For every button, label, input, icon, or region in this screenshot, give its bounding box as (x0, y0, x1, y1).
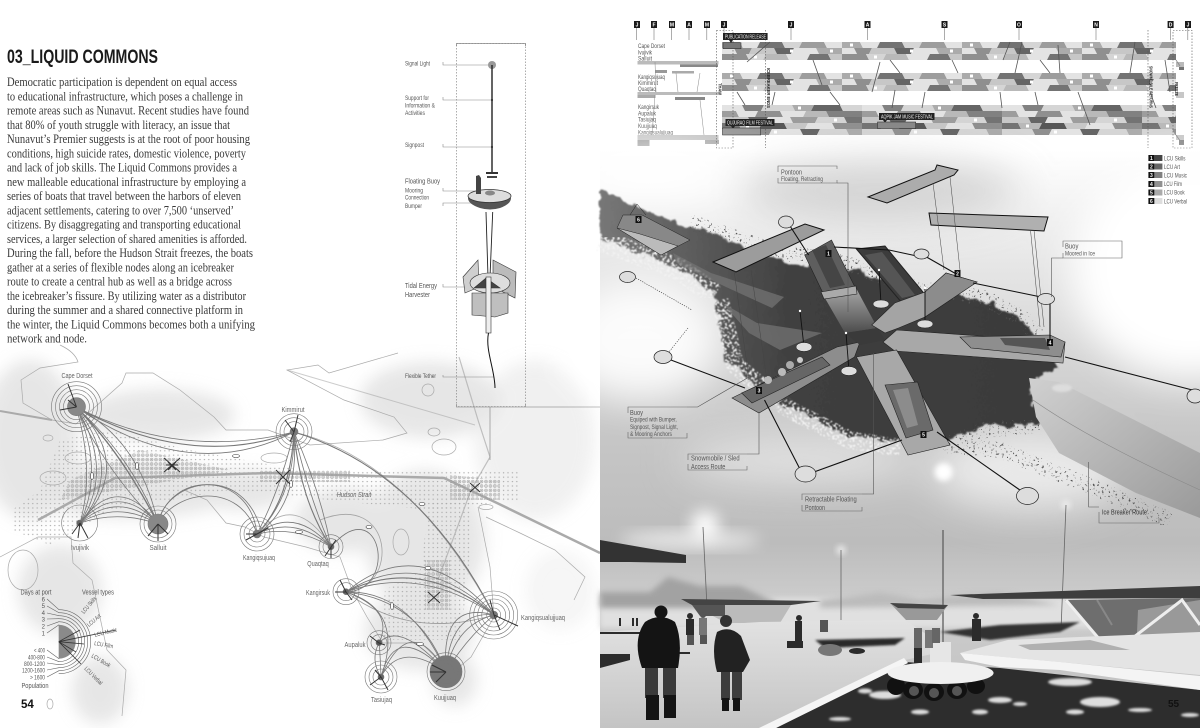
vessel type legend: 2 (1150, 164, 1153, 170)
map legend: days at port, vessel types, population: Vessel types (82, 590, 114, 596)
panel: aerial plan on ice (560, 150, 1200, 728)
body text: gather at a series of flexible nodes along an icebreaker (7, 260, 235, 274)
body text (7, 75, 255, 346)
vessel type legend: 6 (1150, 199, 1153, 205)
settlement row labels: Aupaluk (638, 112, 657, 118)
pavilion centre (890, 603, 948, 620)
vessel type legend: LCU Art (1164, 165, 1180, 171)
buoy labels: Signpost (405, 143, 424, 149)
stub bands (638, 61, 719, 146)
people in foreground (638, 606, 750, 720)
mooring rings (620, 216, 1200, 504)
map legend: days at port, vessel types, population: 1200-1600 (22, 668, 46, 674)
vessel type legend: LCU Film (1164, 182, 1182, 188)
boat 6 (617, 204, 690, 255)
settlement row labels: Cape Dorset (638, 44, 665, 50)
map legend: days at port, vessel types, population (20, 590, 118, 690)
body text: During the fall, before the Hudson Strait freezes, the boats (7, 246, 253, 260)
callout: buoy equipment: & Mooring Anchors (630, 432, 672, 438)
callout: buoy moored in ice: Moored in Ice (1065, 252, 1096, 258)
callout: buoy equipment: Buoy (630, 410, 643, 417)
settlement labels: Kimmirut (282, 407, 305, 414)
month tabs: J (636, 22, 639, 28)
boat number tags: 5 (922, 432, 925, 438)
callout: pontoon: Floating, Retracting (781, 177, 823, 183)
vessel type legend: 1 (1150, 156, 1153, 162)
callout: snowmobile access: Access Route (691, 464, 725, 471)
callout: buoy equipment: Signpost, Signal Light, (630, 425, 678, 431)
settlement labels: Kuujjuaq (434, 695, 456, 702)
panel: Hudson Strait route map (0, 345, 600, 724)
event callouts: QUJURAQ FILM FESTIVAL (727, 120, 773, 126)
vessels and crossing nodes (90, 454, 480, 646)
vessel type legend: LCU Skills (1164, 156, 1185, 162)
callout: retractable pontoon: Retractable Floating (805, 496, 857, 504)
settlement row labels: Kangiqsujuaq (638, 75, 665, 81)
map legend: days at port, vessel types, population: 4 (42, 611, 46, 617)
callout: buoy moored in ice (1063, 241, 1122, 258)
body text: citizens. By disaggregating and transporting educational (7, 218, 241, 232)
settlement labels: Quaqtaq (307, 561, 329, 568)
callout leaders (687, 183, 1099, 507)
vessel type legend: 4 (1150, 182, 1153, 188)
signal post (486, 61, 498, 178)
sun glows (620, 463, 1071, 555)
boat number tags: 3 (758, 388, 761, 394)
month tabs: J (790, 22, 793, 28)
buoy disc (468, 175, 511, 277)
ice chunks (829, 678, 1199, 721)
left roof (600, 540, 686, 563)
settlement labels: Kangirsuk (306, 590, 330, 597)
page number 54: 54 (21, 699, 34, 711)
body text: series of boats that travel between the harbors of eleven (7, 189, 241, 203)
dot grid (12, 430, 520, 640)
land shading (0, 360, 595, 724)
central platform: pontoons and boats (732, 240, 1065, 455)
map legend: days at port, vessel types, population: LCU Film (94, 641, 113, 650)
settlement row labels: Kimmirut (638, 81, 658, 87)
settlement labels: Kangiqsujuaq (243, 555, 275, 562)
far ice and dark water strip (940, 622, 1080, 640)
callout: pontoon: Pontoon (781, 170, 802, 176)
phase labels: SNOWMOBILE RETURNS (1148, 66, 1154, 108)
body text: during the summer and a shared connective platform in (7, 303, 243, 317)
vessel type legend: LCU Book (1164, 190, 1185, 196)
vessel type legend: LCU Music (1164, 174, 1187, 180)
settlement row labels: Kangirsuk (638, 105, 660, 111)
dark openings in the ice (600, 632, 905, 668)
vessel transfers (737, 42, 1181, 142)
buoy labels (405, 62, 440, 380)
month tabs: M (670, 22, 674, 28)
month tabs: N (1094, 22, 1098, 28)
large pavilion right (950, 586, 1200, 655)
callout: ice breaker route (1099, 510, 1159, 523)
buoy labels: Tidal Energy (405, 283, 437, 290)
vessel type legend (1148, 155, 1187, 206)
month tabs: M (705, 22, 709, 28)
phase labels: THAW (718, 83, 722, 96)
platform edge white (759, 632, 1200, 728)
body text: new malleable educational infrastructure by employing a (7, 175, 246, 189)
people in middle distance (619, 612, 981, 663)
month tabs: A (687, 22, 691, 28)
month tabs: J (1187, 22, 1190, 28)
sky and ice background (600, 150, 1200, 728)
phase labels (718, 66, 1179, 108)
map legend: days at port, vessel types, population: 6 (42, 598, 46, 604)
map legend: days at port, vessel types, population: Population (22, 683, 49, 690)
settlement row labels: Ivujivik (638, 50, 653, 56)
buoy labels: Connection (405, 196, 429, 202)
map legend: days at port, vessel types, population: > 1600 (30, 676, 46, 682)
callout: ice breaker route: Ice Breaker Route (1102, 510, 1147, 516)
phase labels: ICEBREAKER ENDS (766, 68, 771, 108)
vessel type legend: LCU Verbal (1164, 200, 1187, 206)
month tabs: S (943, 22, 947, 28)
panel: vessel calendar (634, 21, 1192, 148)
settlement labels: Hudson Strait (337, 492, 372, 499)
map legend: days at port, vessel types, population: 2 (42, 624, 46, 630)
buoy labels: Support for (405, 96, 429, 102)
buoy labels: Floating Buoy (405, 178, 440, 186)
map legend: days at port, vessel types, population: LCU Book (90, 654, 112, 670)
map legend: days at port, vessel types, population: 3 (42, 618, 46, 624)
body text: the winter, the Liquid Commons becomes both a unifying (7, 317, 255, 331)
map legend: days at port, vessel types, population: LCU Music (94, 628, 118, 639)
ice debris (600, 222, 1170, 520)
month tabs: D (1169, 22, 1173, 28)
pavilion left (681, 599, 821, 623)
coastlines and islands (0, 345, 585, 716)
month tabs (634, 21, 1191, 40)
settlement labels: Aupaluk (344, 642, 366, 649)
body text: route to create a central hub as well as a bridge across (7, 275, 232, 289)
light poles (703, 505, 1066, 642)
buoy labels: Information & (405, 104, 435, 110)
body text: adjacent settlements, catering to over 7,500 ‘unserved’ (7, 203, 234, 217)
distant mountains and horizon (600, 577, 1200, 628)
settlement row labels (638, 44, 673, 136)
ice breaker fissure water (600, 190, 1059, 442)
month tabs: J (723, 22, 726, 28)
submerged pontoons (673, 253, 822, 350)
settlement labels: Salluit (150, 545, 167, 552)
event callouts: AQPIK JAM MUSIC FESTIVAL (881, 114, 933, 120)
map legend: days at port, vessel types, population: 5 (42, 604, 46, 610)
settlement labels: Cape Dorset (62, 373, 93, 380)
vessel spokes (60, 384, 518, 690)
dotted ice mooring (636, 278, 692, 352)
mooring lines (663, 226, 1200, 495)
callout: buoy equipment (628, 407, 687, 438)
boat number tags (636, 216, 1053, 438)
boat number tags: 6 (637, 218, 640, 224)
panel: floating buoy section (405, 44, 600, 460)
exploded guide lines (734, 177, 1044, 380)
event callouts (722, 33, 934, 135)
body text: conditions, high suicide rates, domestic violence, poverty (7, 146, 247, 160)
exploded pontoons (713, 165, 1048, 272)
callout: pontoon (778, 166, 837, 183)
vessel type legend: 5 (1150, 190, 1153, 196)
callout: snowmobile access: Snowmobile / Sled (691, 456, 740, 462)
settlement row labels: Kangiqsualujjuaq (638, 130, 673, 136)
vessel type legend: 3 (1150, 173, 1153, 179)
map legend: days at port, vessel types, population: LCU Verbal (83, 666, 103, 687)
title: 03_LIQUID COMMONS (7, 47, 158, 68)
schedule bands (722, 42, 1184, 145)
body text: to educational infrastructure, which poses a challenge in (7, 89, 243, 103)
tidal turbine (463, 260, 516, 388)
callout: snowmobile access (688, 454, 747, 471)
buoy labels: Harvester (405, 292, 431, 299)
body text: Nunavut’s Premier suggests is at the root of poor housing (7, 132, 250, 146)
leader lines (443, 62, 494, 377)
settlement nodes (52, 382, 518, 693)
ice platform foreground (600, 620, 950, 728)
buoy labels: Bumper (405, 204, 422, 210)
settlement row labels: Salluit (638, 56, 652, 62)
callout: buoy equipment: Equiped with Bumper, (630, 418, 677, 424)
body text: network and node. (7, 332, 87, 346)
buoy labels: Mooring (405, 188, 423, 194)
body text: Democratic participation is dependent on equal access (7, 75, 237, 89)
month tabs: A (866, 22, 870, 28)
settlement labels: Kangiqsualujjuaq (521, 615, 565, 622)
map legend: days at port, vessel types, population: LCU Art (86, 613, 103, 629)
floating buoy with tyres (887, 642, 994, 701)
callout: retractable pontoon (802, 494, 862, 512)
body text: the icebreaker’s fissure. By utilizing water as a distributor (7, 289, 247, 303)
callout: retractable pontoon: Pontoon (805, 505, 825, 512)
icebreaker route (0, 357, 600, 580)
settlement row labels: Kuujjuaq (638, 124, 657, 130)
map legend: days at port, vessel types, population: 400-800 (28, 656, 46, 662)
settlement labels: Tasiujaq (371, 697, 392, 704)
phase markers (716, 30, 1192, 148)
panel: winter scene render (600, 463, 1200, 728)
month tabs: O (1017, 22, 1021, 28)
buoy labels: Flexible Tether (405, 374, 436, 380)
month tabs: F (652, 22, 656, 28)
route network (76, 407, 494, 677)
body text: and lack of job skills. The Liquid Commons provides a (7, 161, 237, 175)
callout: buoy moored in ice: Buoy (1065, 244, 1079, 250)
boat number tags: 4 (1049, 340, 1052, 346)
settlement labels: Ivujivik (71, 545, 89, 552)
settlement row labels: Quaqtaq (638, 87, 656, 93)
body text: that 80% of youth struggle with literacy, an issue that (7, 118, 230, 132)
buoy labels: Signal Light (405, 62, 430, 68)
body text: services, a larger selection of shared amenities is afforded. (7, 232, 247, 246)
map legend: days at port, vessel types, population: < 400 (34, 648, 45, 654)
boat number tags: 1 (827, 252, 830, 258)
settlement row labels: Tasiujaq (638, 118, 656, 124)
map legend: days at port, vessel types, population: Days at port (20, 590, 52, 596)
map legend: days at port, vessel types, population: 1 (42, 632, 46, 638)
map legend: days at port, vessel types, population: LCU Skills (81, 596, 98, 615)
map legend: days at port, vessel types, population: 800-1200 (24, 662, 46, 668)
icy water (776, 662, 1200, 728)
event callouts: PUBLICATION RELEASE (725, 34, 766, 40)
settlement labels (62, 373, 565, 704)
body text: remote areas such as Nunavut. Recent studies have found (7, 104, 250, 118)
page number 55: 55 (1168, 699, 1180, 710)
buoy labels: Activities (405, 111, 425, 117)
water buoys and poles (796, 269, 933, 376)
icebreaker ship (1029, 378, 1200, 518)
boat number tags: 2 (956, 272, 959, 278)
phase labels: FREEZE (1174, 82, 1179, 96)
